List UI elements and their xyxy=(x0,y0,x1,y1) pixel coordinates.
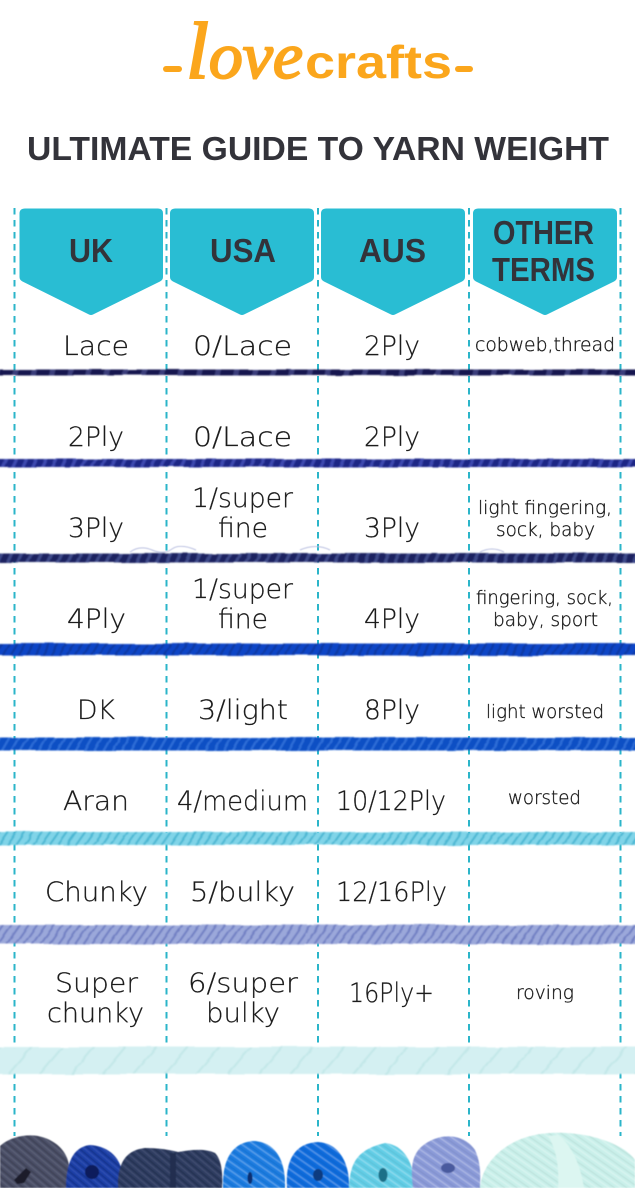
row: 3ply: 3Ply xyxy=(68,513,124,544)
row: chunky: 12/16Ply xyxy=(336,877,447,908)
row: aran: Aran xyxy=(63,786,129,817)
row: 4ply: fingering, sock, xyxy=(476,587,613,609)
row: dk: 3/light xyxy=(198,695,288,726)
row: dk xyxy=(77,695,604,726)
header: UK xyxy=(20,208,163,315)
logo xyxy=(163,8,473,96)
row: 2ply: 0/Lace xyxy=(193,422,292,453)
yarn: aran xyxy=(0,830,635,847)
header: AUS xyxy=(321,208,465,315)
yarn: 4ply xyxy=(0,641,635,658)
title: ULTIMATE GUIDE TO YARN WEIGHT xyxy=(27,130,609,167)
row: super chunky: bulky xyxy=(206,998,280,1029)
row: 3ply xyxy=(68,483,612,544)
logo: crafts xyxy=(305,36,452,88)
yarn: chunky xyxy=(0,923,635,946)
row: super chunky: 16Ply+ xyxy=(349,978,434,1009)
row: chunky xyxy=(45,877,447,908)
yarn: lace xyxy=(0,368,635,378)
ball: mint xyxy=(480,1133,635,1188)
header: USA xyxy=(170,208,314,315)
row: lace: Lace xyxy=(63,331,129,362)
row: super chunky: roving xyxy=(516,982,574,1004)
row: aran: 4/medium xyxy=(177,786,308,817)
row: aran xyxy=(63,786,581,817)
row: 4ply: 4Ply xyxy=(67,604,126,635)
header: other terms: TERMS xyxy=(492,251,595,288)
ball: cobalt blue xyxy=(287,1142,349,1188)
ball: royal blue xyxy=(66,1145,122,1188)
ball: periwinkle xyxy=(412,1136,480,1188)
row: 4ply: baby, sport xyxy=(493,609,598,631)
row: 4ply xyxy=(67,574,613,635)
row: 3ply: light fingering, xyxy=(478,497,612,519)
row: dk: light worsted xyxy=(486,701,604,723)
header: USA: USA xyxy=(210,232,276,269)
ball: sky blue xyxy=(349,1143,414,1188)
yarn balls xyxy=(0,1133,635,1188)
row: lace: cobweb,thread xyxy=(475,334,615,356)
row: 3ply: 3Ply xyxy=(364,513,420,544)
row: super chunky: 6/super xyxy=(188,968,299,999)
skein: navy xyxy=(118,1148,222,1188)
row: 3ply: fine xyxy=(218,513,268,544)
header: other terms xyxy=(473,208,617,315)
header: AUS: AUS xyxy=(359,232,426,269)
row: 4ply: 4Ply xyxy=(364,604,420,635)
row: lace: 2Ply xyxy=(364,331,420,362)
yarn: dk xyxy=(0,735,635,752)
row: super chunky xyxy=(47,968,574,1029)
row: dk: DK xyxy=(77,695,115,726)
row: aran: worsted xyxy=(508,787,581,809)
row: super chunky: chunky xyxy=(47,998,144,1029)
row: chunky: Chunky xyxy=(45,877,148,908)
row: 3ply: 1/super xyxy=(192,483,294,514)
yarn: 3ply xyxy=(0,546,635,564)
ball: charcoal xyxy=(0,1135,69,1188)
row: 4ply: 1/super xyxy=(192,574,294,605)
row: 2ply: 2Ply xyxy=(68,422,124,453)
yarn: 2ply xyxy=(0,457,635,469)
ball: bright blue xyxy=(223,1141,285,1188)
row: aran: 10/12Ply xyxy=(336,786,446,817)
row: lace: 0/Lace xyxy=(193,331,292,362)
header: UK: UK xyxy=(69,232,113,269)
row: 4ply: fine xyxy=(218,604,268,635)
header: other terms: OTHER xyxy=(493,214,594,251)
yarn: super chunky xyxy=(0,1046,635,1076)
logo: love xyxy=(186,8,303,96)
row: 2ply xyxy=(68,422,420,453)
row: dk: 8Ply xyxy=(364,695,420,726)
row: lace xyxy=(63,331,615,362)
row: super chunky: Super xyxy=(55,968,139,999)
row: 2ply: 2Ply xyxy=(364,422,420,453)
row: chunky: 5/bulky xyxy=(190,877,295,908)
row: 3ply: sock, baby xyxy=(496,519,595,541)
